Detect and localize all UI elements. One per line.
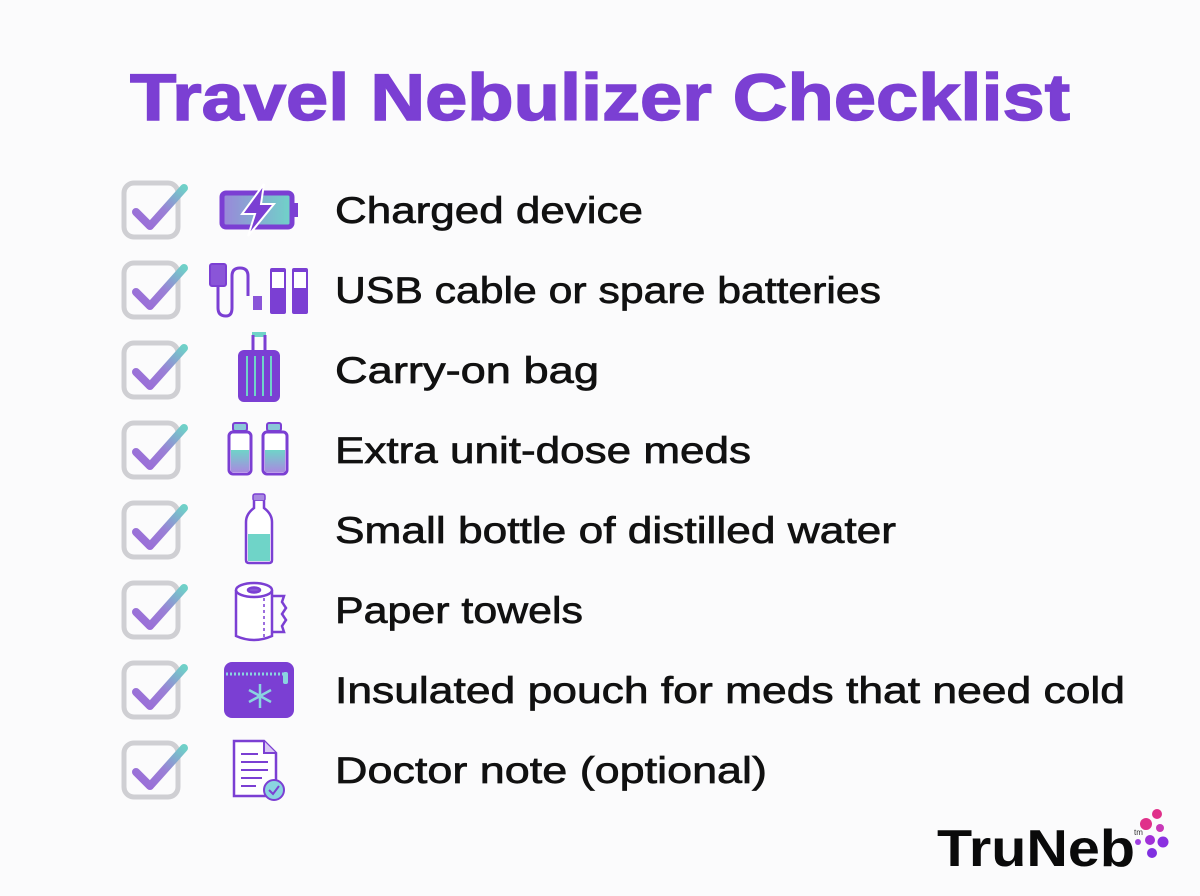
row: paper towels	[124, 583, 583, 640]
logo	[937, 809, 1168, 878]
row: usb cable: USB cable or spare batteries	[335, 270, 881, 311]
row: charged device: Charged device	[335, 190, 643, 231]
row: usb cable	[124, 263, 881, 317]
row: insulated pouch: Insulated pouch for meds that need cold	[335, 670, 1125, 711]
icon: paper towel	[236, 583, 286, 640]
icon: cold pouch	[224, 662, 294, 718]
icon: suitcase	[238, 332, 280, 402]
row: carry-on bag	[124, 332, 599, 402]
icon: cable and batteries	[210, 264, 308, 316]
logo: TruNeb	[937, 820, 1135, 878]
row: water	[124, 494, 896, 563]
row: meds: Extra unit-dose meds	[335, 430, 751, 471]
title: Travel Nebulizer Checklist	[130, 60, 1070, 134]
row: insulated pouch	[124, 662, 1125, 718]
row: paper towels: Paper towels	[335, 590, 583, 631]
row: charged device	[124, 183, 643, 237]
row: meds	[124, 423, 751, 477]
row: carry-on bag: Carry-on bag	[335, 350, 599, 391]
icon: bottle	[246, 494, 272, 563]
logo: tm	[1134, 828, 1143, 837]
row: water: Small bottle of distilled water	[335, 510, 896, 551]
row: doctor note	[124, 741, 767, 800]
icon: battery	[222, 184, 298, 236]
icon: vials	[229, 423, 287, 474]
icon: document	[234, 741, 284, 800]
row: doctor note: Doctor note (optional)	[335, 750, 767, 791]
